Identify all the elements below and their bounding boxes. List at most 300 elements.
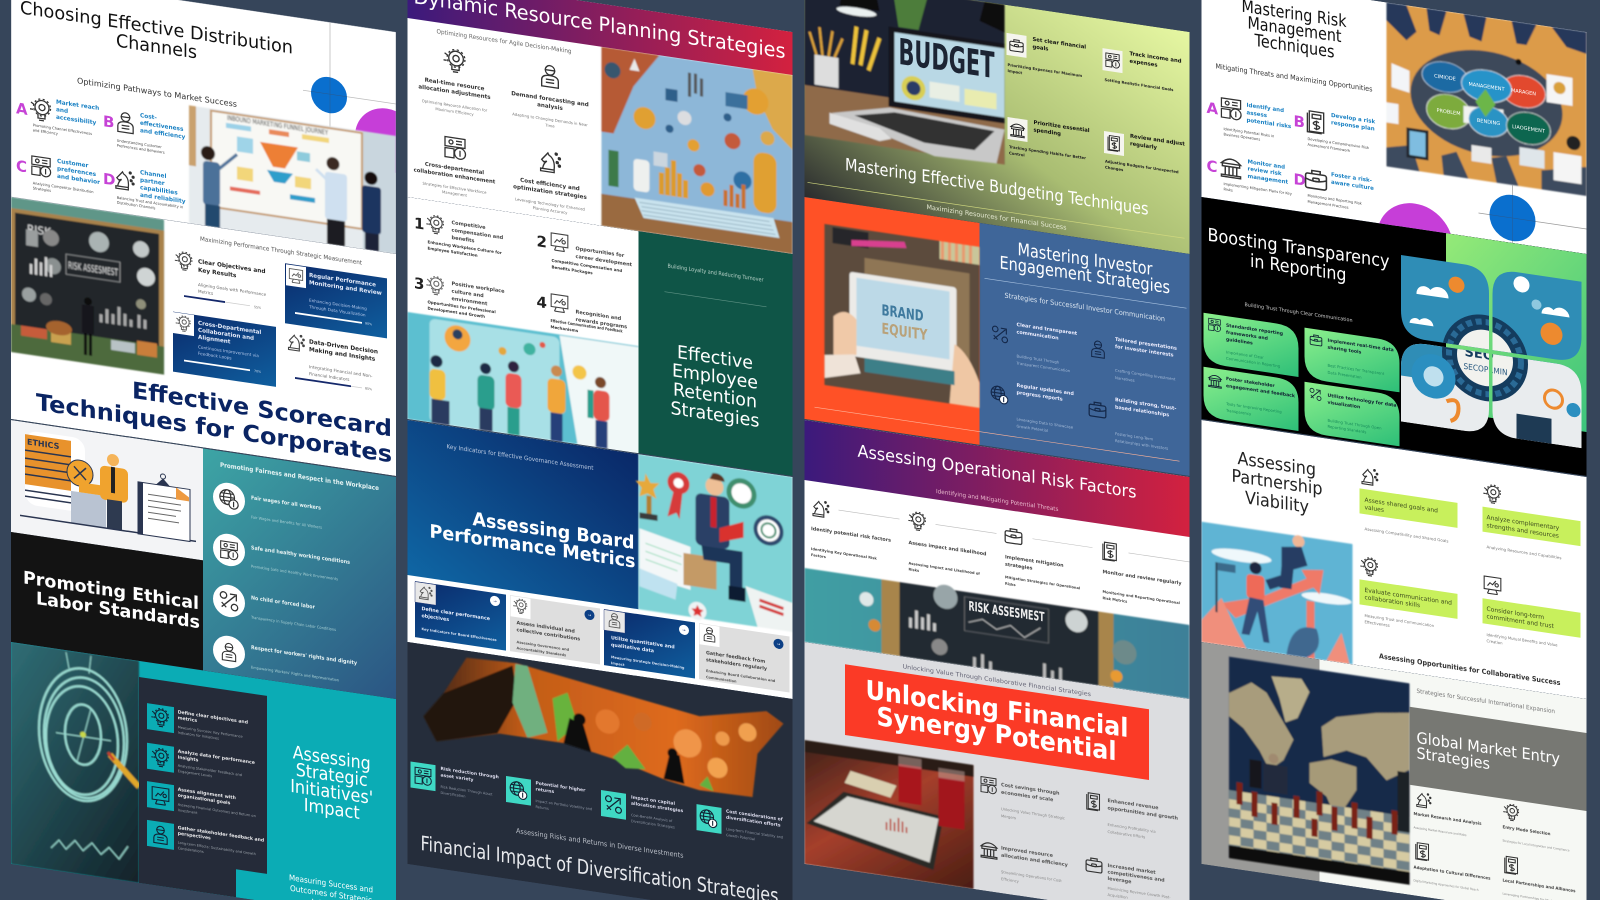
card: shared goals: values — [1364, 504, 1384, 514]
card: cross-departmental: Continuous Improvement via — [198, 344, 259, 358]
item: real-time: Maximum Efficiency — [435, 106, 474, 117]
item: enhanced revenue — [1087, 793, 1178, 844]
card: quantitative: Utilize quantitative and — [611, 635, 675, 651]
icon: thumbs check — [289, 269, 303, 284]
card: complementary strengths: strengths and resources — [1487, 522, 1559, 540]
item D: Channel — [140, 170, 166, 180]
image labels — [1434, 73, 1546, 135]
card: regular monitoring: 90% — [365, 321, 372, 326]
item: prioritize: Prioritize essential — [1034, 120, 1090, 134]
item: improved allocation: Efficiency — [1001, 877, 1020, 884]
item D: Foster a risk- — [1331, 172, 1372, 184]
item: no child labor — [213, 583, 336, 633]
card: define objectives: objectives — [422, 613, 449, 623]
title: Assessing — [293, 742, 371, 775]
title: Impact — [304, 795, 360, 824]
image text: brand equity: BRAND — [882, 301, 924, 325]
column 4: slide, Global Market Entry Strategies — [1202, 642, 1586, 900]
item: regular updates: progress reports — [1016, 390, 1063, 403]
item: transparent communication: Clear and transparent — [1016, 322, 1078, 337]
item D — [1294, 167, 1374, 214]
item C: Risks — [1224, 187, 1233, 193]
item A: Business Operations — [1224, 132, 1260, 142]
image labels: MANAGEMENT — [1468, 82, 1505, 93]
item: strong relationships: based relationships — [1115, 404, 1169, 418]
item: alignment — [147, 781, 256, 824]
item D: Balancing Trust and Accountability in — [117, 196, 183, 209]
image labels: PROBLEM — [1436, 108, 1461, 117]
item: improved allocation: Improved resource — [1001, 845, 1054, 859]
card: gather feedback: Communication — [706, 675, 737, 684]
item: cost savings: economies of scale — [1001, 790, 1054, 803]
item: market research — [1414, 792, 1482, 840]
image labels: LIAOGEMENT — [1512, 124, 1546, 135]
image text: brand equity: EQUITY — [882, 319, 928, 344]
item: cost efficiency: optimization strategies — [513, 184, 587, 201]
item: cultural differences: Adaptation to Cultural Differences — [1414, 864, 1491, 881]
item D — [104, 170, 186, 210]
column 3: slide, Assessing Operational Risk Factors — [804, 420, 1190, 699]
item: cost considerations: diversification efforts — [726, 815, 781, 829]
step 3: Mitigation Strategies for Operational — [1005, 575, 1080, 590]
card: shared goals: Assessing Compatibility and Shared Goals — [1364, 526, 1449, 544]
card: standardize: guidelines — [1226, 337, 1253, 347]
item: cost considerations — [696, 804, 783, 846]
card: assess contributions: Accountability Standards — [516, 646, 566, 657]
card: long-term: Consider long-term — [1487, 606, 1544, 621]
item: strong relationships: Fostering Long-Term — [1115, 431, 1153, 442]
item: analyze — [147, 742, 255, 778]
item: analyze: Analyze data for performance — [178, 749, 255, 766]
item: market leverage: Maximizing Revenue Growth Post- — [1108, 886, 1171, 900]
card: assess contributions: collective contributions — [516, 627, 580, 643]
step 1: Factors — [811, 553, 826, 559]
title: Engagement Strategies — [1000, 253, 1170, 298]
item: fair wages: Fair Wages and Benefits for All Workers — [251, 514, 322, 530]
image: risk assessment chalkboard: RISK ASSESMEST — [68, 260, 118, 279]
item: demand: Time — [544, 122, 555, 129]
item: market research: Market Research and Analysis — [1414, 811, 1482, 826]
card: complementary strengths: Analyze complementary — [1487, 514, 1560, 532]
item: tailored presentations: Crafting Compelling Investment — [1115, 368, 1176, 382]
subtitle: Optimizing Resources for Agile Decision-Making — [436, 28, 572, 55]
image: budget laptop on desk — [804, 0, 1004, 167]
card: quantitative — [604, 609, 695, 679]
item: market leverage: Increased market — [1108, 863, 1156, 876]
image text: risk assessment: RISK ASSESMEST — [968, 599, 1045, 626]
item D: D — [103, 170, 115, 189]
item 3: culture and — [452, 289, 484, 299]
item: demand: analysis — [537, 102, 563, 112]
image: risk assessment chalkboard banner — [804, 564, 1190, 699]
image: partners climbing arrow — [1202, 521, 1352, 664]
step 4: Risk Metrics — [1102, 596, 1127, 604]
item: entry mode — [1502, 803, 1570, 852]
item D: Monitoring and Reporting Risk — [1308, 194, 1363, 206]
item: objectives: metrics — [178, 715, 197, 724]
column 4: slide, Mastering Risk Management Techniques — [1202, 0, 1586, 305]
item: cost efficiency: Leveraging Technology for Enhanced — [515, 196, 586, 212]
item B: Assessment Framework — [1308, 143, 1351, 153]
item: track income: Track income and — [1130, 51, 1182, 65]
card: stakeholder: Tools for Improving Reporting — [1225, 401, 1282, 414]
item 4: rewards programs — [576, 317, 627, 330]
item: feedback: Gather stakeholder feedback and — [178, 825, 264, 844]
item: strong relationships: Building strong, trust- — [1115, 397, 1176, 412]
item C: and behavior — [57, 174, 100, 186]
card: assess contributions: Assess individual and — [516, 620, 575, 635]
item: cost efficiency: Planning Accuracy — [533, 205, 568, 215]
item 2: Benefits Packages — [552, 264, 593, 275]
item 4: Effective Communication and Feedback — [550, 318, 623, 334]
item 2: career development — [576, 254, 633, 268]
subtitle: Building Trust Through Clear Communication — [1245, 302, 1353, 324]
card: communication: Measuring Trust and Communication — [1364, 613, 1435, 628]
card: long-term: commitment and trust — [1487, 613, 1555, 630]
item: feedback: perspectives — [178, 831, 211, 842]
item C: C — [1206, 157, 1218, 176]
item C: preferences — [57, 166, 97, 178]
item D: partner — [140, 178, 165, 187]
panel: title block — [11, 532, 203, 670]
card: shared goals — [1360, 467, 1458, 545]
card: data-driven: Data-Driven Decision — [309, 339, 378, 356]
item: fair wages — [213, 481, 322, 530]
card: quantitative: → — [682, 627, 686, 633]
item: cross-department: collaboration enhancement — [414, 167, 496, 186]
item C: Customer — [57, 159, 89, 169]
item: enhanced revenue: Enhanced revenue — [1108, 798, 1159, 811]
item C: Analyzing Competitor Distribution — [33, 181, 94, 194]
panel: title — [1410, 707, 1586, 811]
card: stakeholder: engagement and feedback — [1226, 383, 1296, 399]
card: cross-departmental: Cross-Departmental — [198, 321, 261, 336]
item: transparent communication: Building Trust Through — [1016, 353, 1060, 365]
item: tailored presentations: Tailored presentations — [1115, 337, 1177, 352]
item: review — [1104, 130, 1185, 181]
banner title: Synergy Potential — [876, 702, 1117, 767]
card: technology — [1304, 382, 1400, 446]
card: regular monitoring: Monitoring and Review — [309, 280, 382, 297]
item: higher returns — [506, 776, 592, 817]
subtitle: Unlocking Value Through Collaborative Financial Strategies — [902, 663, 1091, 698]
item 1 — [414, 212, 504, 262]
step 2: Risks — [908, 567, 919, 573]
title: Labor Standards — [36, 589, 200, 633]
item D: Distribution Channels — [117, 201, 156, 210]
item: tailored presentations — [1092, 333, 1177, 389]
image: risk assessment chalkboard — [11, 197, 164, 375]
image: team at marketing funnel whiteboard: INBOUND MARKETING FUNNEL JOURNEY — [227, 113, 329, 137]
item: capital allocation: Diversification Strategies — [631, 819, 675, 830]
card: technology: Reporting Standards — [1328, 424, 1366, 434]
image: team around risk management diagram — [1386, 2, 1586, 196]
item: objectives: Indicators for Initiatives — [178, 731, 219, 741]
item 2: 2 — [536, 232, 547, 252]
title: Assessing Operational Risk Factors — [858, 442, 1137, 503]
item: review: Review and adjust — [1130, 133, 1185, 148]
subtitle: Mitigating Threats and Maximizing Opportunities — [1216, 61, 1373, 94]
item 2: Opportunities for — [576, 246, 625, 259]
title: Channels — [116, 31, 197, 64]
item A: potential risks — [1247, 118, 1292, 130]
card: real-time: Implement real-time data — [1328, 338, 1394, 353]
item: entry mode: Strategies for Local Integration and Compliance — [1502, 839, 1570, 852]
title: Effective — [677, 342, 753, 374]
card: clear objectives: Clear Objectives and — [198, 259, 266, 275]
card: define objectives: → — [493, 598, 497, 604]
item: capital allocation: allocation strategies — [631, 801, 683, 814]
item: higher returns: Returns — [536, 805, 549, 811]
item 1: Competitive — [452, 220, 486, 231]
item C: C — [16, 157, 27, 176]
subtitle: Strategies for Successful International Expansion — [1416, 688, 1555, 715]
card: gather feedback: Enhancing Board Collaboration and — [706, 669, 776, 683]
item: cost savings: Unlocking Value Through Strategic — [1001, 807, 1065, 821]
item B: and efficiency — [140, 128, 185, 141]
item C: Monitor and — [1248, 159, 1285, 171]
item: demand — [511, 60, 589, 134]
card: standardize: Communication in Reporting — [1226, 356, 1281, 369]
card: cross-departmental — [173, 312, 276, 387]
item: capital allocation — [601, 790, 683, 831]
item: real-time — [418, 44, 491, 119]
step 2 — [908, 511, 996, 584]
item: cost considerations: Cost considerations of — [726, 809, 783, 823]
subtitle: Strategies for Successful Investor Communication — [1005, 291, 1165, 323]
step 4: Monitoring and Reporting Operational — [1102, 590, 1180, 605]
item: alignment: Investment — [178, 808, 198, 815]
item 3 — [414, 273, 505, 322]
item: feedback: Considerations — [178, 846, 204, 854]
card: long-term: Creation — [1487, 638, 1503, 646]
icon: chess knight — [288, 334, 304, 352]
item: transparent communication: communication — [1016, 329, 1059, 342]
column 4: slide, Assessing Partnership Viability — [1202, 420, 1586, 699]
item 1: Employee Satisfaction — [428, 245, 478, 258]
item: cost efficiency — [513, 147, 587, 218]
header band — [804, 420, 1190, 537]
item: objectives — [147, 703, 248, 740]
title: Techniques for Corporates — [36, 390, 392, 468]
image: SEO gear petals: SEO — [1465, 345, 1494, 364]
title: Strategic — [296, 760, 368, 791]
item: no child labor: No child or forced labor — [251, 595, 315, 611]
card: assess contributions: → — [588, 612, 592, 618]
title — [670, 341, 760, 432]
item: real-time: Optimizing Resource Allocation for — [422, 98, 488, 113]
item: objectives: Define clear objectives and — [178, 709, 248, 726]
item: demand: Adapting to Changing Demands in Near — [512, 111, 588, 128]
item: feedback — [147, 820, 264, 863]
item A: and Efficiency — [33, 128, 59, 136]
item B: Understanding Customer — [117, 139, 162, 149]
title: Promoting Ethical — [23, 568, 199, 614]
item: review: regularly — [1130, 141, 1158, 151]
item: improved allocation: Streamlining Operations for Cost — [1001, 870, 1062, 883]
card: data-driven: Financial Indicators — [309, 371, 349, 382]
item: demand: Demand forecasting and — [511, 91, 589, 109]
item: market leverage — [1086, 857, 1171, 900]
card: communication — [1360, 556, 1458, 638]
item 1: benefits — [452, 235, 474, 244]
item: safe conditions — [213, 534, 350, 580]
item: rights: Empowering Workers' Rights and Representation — [251, 665, 340, 683]
card: standardize: frameworks and — [1226, 330, 1268, 342]
item: safe conditions: Safe and healthy working conditions — [251, 545, 350, 566]
item: analyze: Engagement Levels — [178, 769, 212, 778]
item: entry mode: Entry Mode Selection — [1502, 824, 1551, 836]
item B: Developing a Comprehensive Risk — [1308, 137, 1370, 150]
item: risk reduction — [410, 761, 499, 804]
card: real-time — [1304, 328, 1400, 392]
panel: title: Strategies — [1416, 744, 1490, 773]
card: real-time: Best Practices for Transparent — [1328, 363, 1385, 376]
item B — [1294, 107, 1375, 157]
item B — [104, 112, 186, 154]
title: Techniques — [1254, 31, 1335, 63]
item: cost savings — [981, 777, 1065, 828]
title: Mastering Effective Budgeting Techniques — [845, 155, 1149, 220]
item B: Develop a risk — [1331, 113, 1375, 125]
item 2: Competitive Compensation and — [552, 258, 622, 273]
item D: Management Practices — [1308, 200, 1349, 210]
item: prioritize — [1008, 116, 1090, 167]
item A: A — [16, 99, 28, 119]
item A — [1206, 96, 1292, 146]
image text: brand equity — [882, 301, 928, 344]
item: regular updates — [991, 379, 1074, 437]
item A — [16, 98, 99, 136]
card: quantitative: Measuring Strategic Decision-Making — [611, 655, 685, 670]
card: define objectives: Define clear performance — [422, 606, 491, 622]
card: data-driven: Making and Insights — [309, 347, 376, 363]
item C — [1206, 153, 1293, 201]
column 4: slide, Boosting Transparency in Reporting — [1202, 197, 1586, 476]
item: market leverage: competitiveness and — [1108, 869, 1165, 884]
subtitle: Assessing Opportunities for Collaborative Success — [1379, 651, 1561, 687]
panel: title — [408, 420, 638, 609]
title: Partnership — [1232, 467, 1323, 500]
step 3 — [1005, 528, 1092, 599]
item 2 — [536, 231, 633, 281]
card: communication: collaboration skills — [1364, 594, 1420, 609]
item B: Cost- — [140, 113, 157, 122]
item 4: 4 — [536, 293, 547, 312]
item: market leverage: Acquisition — [1108, 893, 1128, 900]
title: Mastering Investor — [1018, 240, 1153, 280]
step 3: Implement mitigation — [1005, 554, 1064, 569]
item 4: Mechanisms — [550, 324, 579, 333]
title — [1232, 448, 1322, 520]
card: gather feedback: → — [777, 641, 781, 647]
item: alignment: organizational goals — [178, 793, 231, 806]
item 3: 3 — [414, 274, 424, 293]
item D: and reliability — [140, 193, 186, 205]
item B: response plan — [1331, 120, 1375, 133]
item: review: Changes — [1105, 164, 1124, 172]
item 4 — [536, 292, 627, 340]
item: cost efficiency: Cost efficiency and — [520, 178, 580, 192]
image: risk assessment chalkboard: RISK — [27, 222, 52, 239]
title: in Reporting — [1250, 251, 1346, 286]
image: brushed finance silhouette — [424, 649, 784, 803]
card: standardize: Standardize reporting — [1226, 323, 1283, 337]
item: objectives: Measuring Success: Key Performance — [178, 725, 243, 739]
item: goals: Prioritizing Expenses for Maximum — [1008, 62, 1082, 78]
card: data-driven: Integrating Financial and Non- — [309, 364, 373, 379]
item: cost considerations: Growth Potential — [726, 833, 755, 841]
panel: workplace list: Promoting Fairness and Respect in the Workplace — [220, 462, 379, 492]
card: real-time: sharing tools — [1328, 345, 1362, 356]
banner title — [845, 664, 1149, 780]
item 3: Opportunities for Professional — [428, 299, 496, 314]
card: cross-departmental: Alignment — [198, 335, 231, 346]
card: clear objectives: 55% — [254, 305, 261, 310]
item: local partnerships: Local Partnerships and Alliances — [1502, 878, 1576, 893]
item C: Strategies — [33, 186, 51, 193]
card: regular monitoring: Through Data Visualization — [308, 304, 366, 318]
card: clear objectives — [175, 251, 267, 311]
item: goals: goals — [1032, 44, 1048, 53]
item: prioritize: spending — [1034, 127, 1061, 137]
item: improved allocation: allocation and efficiency — [1001, 853, 1069, 869]
subtitle: Maximizing Performance Through Strategic Measurement — [200, 236, 363, 267]
card: data-driven: 85% — [365, 386, 372, 391]
panel: title: Performance Metrics — [430, 521, 636, 573]
item: review: Adjusting Budgets for Unexpected — [1105, 158, 1179, 174]
item 4: Recognition and — [576, 309, 622, 322]
item: analyze: insights — [178, 754, 199, 764]
card: cross-departmental: Feedback Loops — [198, 351, 232, 361]
panel: title: Assessing Board — [472, 509, 635, 554]
image text: BUDGET: BUDGET — [898, 30, 995, 87]
item: cost savings: Mergers — [1001, 814, 1016, 820]
item B: Preferences and Behaviors — [117, 144, 165, 155]
card: real-time: Data Presentation — [1328, 370, 1362, 380]
item: cross-department — [414, 132, 496, 202]
item 3: Positive workplace — [452, 281, 505, 295]
item B: B — [1294, 112, 1305, 132]
column 2: slide, Dynamic Resource Planning Strategies — [408, 0, 792, 254]
item B: effectiveness — [140, 121, 184, 133]
item C — [16, 155, 100, 194]
header band: Identifying and Mitigating Potential Threats — [936, 489, 1059, 513]
card: communication: Evaluate communication and — [1364, 587, 1452, 607]
image: SEO gear petals: SECOPRMIN — [1464, 362, 1508, 377]
card: standardize: Importance of Clear — [1226, 349, 1264, 360]
title: Strategies — [671, 398, 760, 432]
card: clear objectives: Metrics — [198, 289, 213, 296]
item: enhanced revenue: Enhancing Profitability via — [1108, 823, 1156, 834]
title — [1208, 225, 1390, 292]
card: technology: Utilize technology for data — [1328, 393, 1396, 409]
decoration: circle and half circle — [1377, 165, 1586, 305]
card: cross-departmental: Collaboration and — [198, 328, 254, 342]
item: feedback: Long-term Effects: Sustainability and Growth — [178, 841, 256, 856]
item: goals: Impact — [1008, 68, 1022, 75]
icon: bank — [32, 156, 51, 177]
card: assess contributions: Assessing Governance and — [516, 640, 570, 652]
item A: assess — [1247, 110, 1268, 119]
panel: workplace list — [203, 448, 396, 699]
card: shared goals: Assess shared goals and — [1364, 497, 1438, 515]
item: risk reduction: asset variety — [441, 772, 474, 783]
title — [290, 742, 373, 826]
card: long-term — [1482, 576, 1580, 657]
banner title: Unlocking Financial — [866, 675, 1129, 744]
panel: title: Key Indicators for Effective Governance Assessment — [446, 443, 594, 472]
